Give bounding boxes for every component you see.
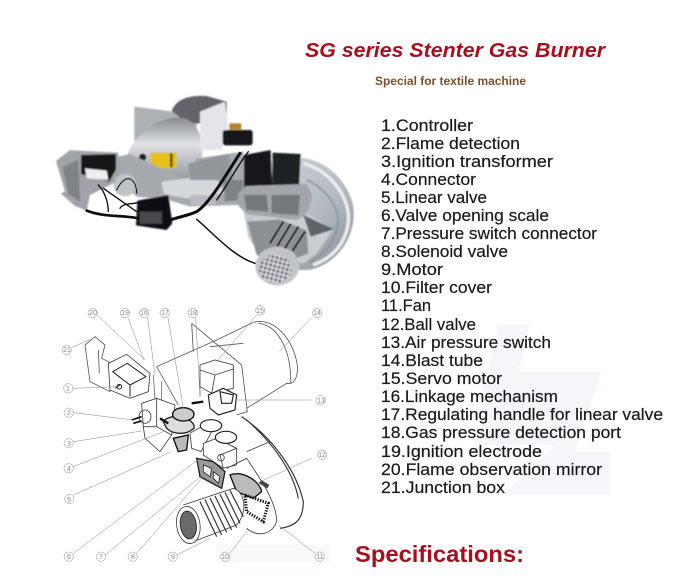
- photo: cables: [87, 152, 255, 263]
- parts list: 19.Ignition electrode: [381, 442, 542, 461]
- drawing: callout numbers: 12: [318, 452, 326, 459]
- drawing: callout numbers: 17: [161, 310, 169, 317]
- parts list: 16.Linkage mechanism: [381, 387, 558, 406]
- drawing: callout numbers: 21: [63, 347, 71, 354]
- drawing: callout numbers: 13: [317, 398, 325, 405]
- parts list: 14.Blast tube: [381, 351, 483, 370]
- drawing: flame detection and transformer: [142, 398, 175, 452]
- photo: yellow label: [150, 153, 176, 168]
- drawing: callout numbers: 3: [67, 441, 71, 448]
- parts list: 1.Controller: [381, 116, 473, 135]
- drawing: callout numbers: 7: [99, 554, 103, 561]
- parts list: 6.Valve opening scale: [381, 206, 549, 225]
- title: SG series Stenter Gas Burner: [305, 39, 606, 62]
- subtitle: Special for textile machine: [375, 74, 526, 88]
- parts list: 17.Regulating handle for linear valve: [381, 405, 663, 424]
- technical drawing: [62, 306, 327, 561]
- drawing: callout numbers: 18: [189, 310, 197, 317]
- drawing: callout numbers: 1: [66, 386, 70, 393]
- drawing: callout numbers: 10: [221, 554, 229, 561]
- drawing: number callouts: [62, 306, 327, 561]
- photo: central valve body: [115, 152, 248, 207]
- drawing: callout numbers: 8: [131, 554, 135, 561]
- parts list: 2.Flame detection: [381, 134, 520, 153]
- drawing: linkage: [153, 367, 200, 405]
- drawing: callout numbers: 19: [121, 310, 129, 317]
- drawing: junction box and controller: [85, 337, 112, 392]
- parts list: 7.Pressure switch connector: [381, 224, 597, 243]
- photo: fan housing: [244, 157, 354, 270]
- drawing background patch: [217, 545, 330, 563]
- parts list: 8.Solenoid valve: [381, 242, 508, 261]
- drawing: callout numbers: 4: [67, 466, 71, 473]
- drawing: callout numbers: 16: [140, 310, 148, 317]
- drawing: callout numbers: 20: [89, 310, 97, 317]
- parts list: 5.Linear valve: [381, 188, 487, 207]
- parts list: 12.Ball valve: [381, 315, 476, 334]
- photo: blast tube and mounting plate: [134, 107, 197, 152]
- drawing: fan housing: [242, 417, 303, 528]
- drawing: motor: [183, 488, 244, 542]
- photo: motor fins: [270, 222, 305, 251]
- parts list: 9.Motor: [381, 260, 443, 279]
- drawing: callout numbers: 15: [256, 308, 264, 315]
- drawing: leader lines: [72, 315, 315, 555]
- photo: flame sensor: [223, 130, 253, 145]
- photo: left controller bracket: [56, 150, 120, 211]
- parts list: 4.Connector: [381, 170, 476, 189]
- parts list: 18.Gas pressure detection port: [381, 423, 621, 442]
- parts list: 10.Filter cover: [381, 278, 492, 297]
- parts list: 3.Ignition transformer: [381, 152, 553, 171]
- drawing: callout numbers: [63, 308, 326, 561]
- photo: solenoid valve blocks: [244, 150, 272, 188]
- drawing: linear valve: [163, 417, 194, 433]
- drawing: callout numbers: 11: [316, 554, 324, 561]
- watermark: [474, 325, 610, 495]
- drawing: callout numbers: 5: [67, 497, 71, 504]
- photo: motor: [247, 219, 308, 265]
- parts list: 15.Servo motor: [381, 369, 502, 388]
- parts list: 13.Air pressure switch: [381, 333, 551, 352]
- parts list: 20.Flame observation mirror: [381, 460, 602, 479]
- photo: junction box: [136, 195, 172, 230]
- drawing: callout numbers: 9: [171, 554, 175, 561]
- photo: gas burner: [56, 96, 354, 285]
- drawing: blast tube: [157, 321, 297, 415]
- drawing: callout numbers: 6: [67, 554, 71, 561]
- parts list: 21.Junction box: [381, 478, 506, 497]
- drawing: callout numbers: 14: [313, 310, 321, 317]
- parts list: 11.Fan: [381, 296, 431, 315]
- drawing: solenoid valves: [190, 427, 212, 452]
- parts list: [381, 116, 663, 497]
- drawing: servo motor and pressure switch: [200, 360, 233, 393]
- drawing: callout numbers: 2: [67, 410, 71, 417]
- heading: specifications: Specifications:: [355, 541, 524, 567]
